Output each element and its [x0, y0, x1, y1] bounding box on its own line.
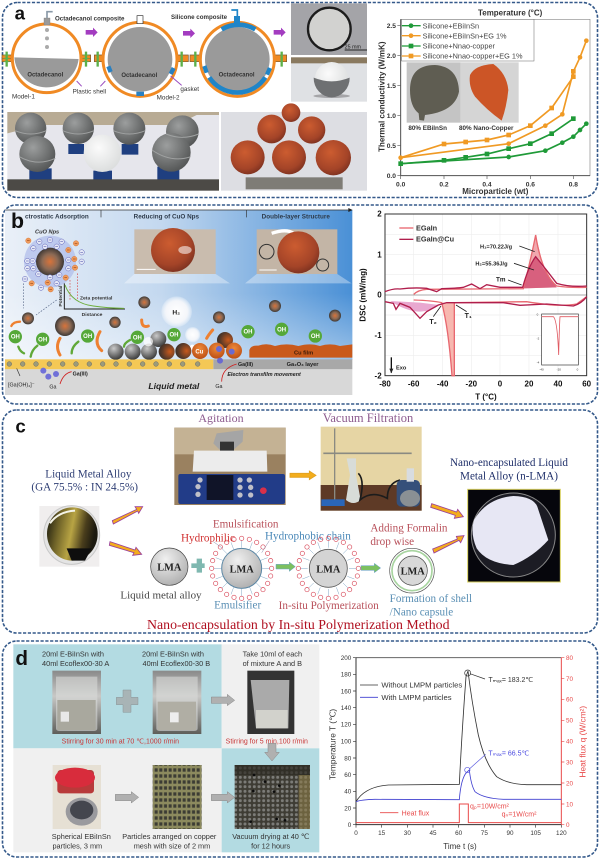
DSC axis ticks and labels: 0: [377, 291, 382, 300]
step captions: 20ml E-BiInSn with: [142, 650, 204, 659]
CuO nanoparticle cluster: [22, 229, 84, 315]
left axis labels: 200: [341, 655, 352, 662]
DSC axis ticks and labels: 40: [554, 380, 563, 389]
chart legend and annotations: Tₘₐₓ= 183.2℃: [488, 677, 533, 684]
right axis labels: 20: [566, 780, 574, 787]
emulsification labels: Emulsifier: [214, 599, 261, 611]
emulsification labels: Emulsification: [213, 519, 279, 531]
step captions: 20ml E-BiInSn with: [42, 650, 104, 659]
heat flux curve: [356, 804, 561, 823]
photo: copper coated spheres with ruler: [221, 103, 367, 191]
step captions: Vacuum drying at 40 ℃: [232, 832, 309, 841]
curve without particles: [356, 671, 561, 802]
layer and reaction labels: Ga: [49, 384, 56, 390]
chart legend and annotations: Without LMPM particles: [381, 681, 462, 690]
diagram labels: Octadecanol: [219, 73, 255, 79]
layer and reaction labels: Ga(III): [238, 362, 253, 368]
hydroxide ions: OH: [277, 327, 286, 333]
product heading: Metal Alloy (n-LMA): [460, 470, 558, 482]
left axis labels: 180: [341, 672, 352, 679]
axis labels and tick values: 0.2: [439, 182, 449, 189]
left axis labels: 120: [341, 722, 352, 729]
diagram labels: Octadecanol: [121, 73, 158, 79]
peak annotations: H₂=55.36J/g: [475, 262, 508, 268]
step captions: for 12 hours: [251, 841, 291, 850]
step captions: particles, 3 mm: [52, 841, 102, 850]
photo: sphere top view: 25 mm: [345, 45, 362, 51]
emulsification labels: In-situ Polymerization: [279, 600, 379, 612]
axis labels and tick values: Microparticle (wt): [462, 187, 529, 196]
chart: temperature and heat flux vs time: [327, 655, 588, 851]
CuO nanoparticle cluster: CuO Nps: [35, 229, 59, 235]
step captions: 40ml Ecoflex00-30 B: [143, 659, 210, 668]
left axis labels: 100: [341, 739, 352, 746]
axis labels and tick values: 0.8: [569, 182, 578, 189]
hydroxide ions: [9, 323, 322, 346]
hydroxide ions: OH: [38, 337, 47, 343]
step captions: Take 10ml of each: [243, 650, 302, 659]
step captions: Particles arranged on copper: [122, 832, 217, 841]
panel letter b: b: [11, 209, 24, 233]
hydroxide ions: OH: [170, 333, 178, 339]
EGaIn@Cu curve: [385, 257, 587, 318]
bottom axis labels: 105: [530, 830, 541, 837]
axis labels and tick values: 0.0: [387, 173, 396, 180]
layer and reaction labels: Ga: [215, 384, 222, 390]
shaded peak areas: [390, 235, 557, 376]
emulsified LMA sphere: LMA: [230, 564, 254, 575]
right axis labels: 10: [566, 801, 574, 808]
emulsification labels: [181, 519, 379, 612]
panel c left half: [15, 411, 450, 632]
bottom axis labels: 120: [556, 830, 567, 837]
copper film: Cu film: [294, 351, 313, 357]
left axis labels: 20: [344, 805, 352, 812]
nano capsule: [390, 548, 434, 593]
header stage labels: ctrostatic Adsorption: [25, 214, 89, 221]
axis labels and tick values: 1.5: [387, 83, 396, 90]
formalin and capsule labels: Adding Formalin: [370, 523, 448, 535]
diagram labels: Model-1: [12, 94, 35, 101]
product heading: Nano-encapsulated Liquid: [450, 457, 568, 469]
diagram labels: Octadecanol: [27, 73, 64, 79]
beaker A photo: [52, 671, 101, 734]
legend: [402, 19, 534, 61]
photo: sphere top view: [291, 3, 367, 55]
orange arrows to product: [431, 504, 464, 553]
right axis labels: [566, 655, 588, 829]
hydroxide ions: OH: [133, 335, 142, 341]
chart: DSC curves: [358, 210, 592, 401]
hydroxide ions: OH: [311, 334, 320, 340]
liquid metal alloy heading: Liquid Metal Alloy: [45, 468, 132, 480]
formalin and capsule labels: Formation of shell: [390, 593, 472, 605]
hydroxide ions: OH: [11, 335, 20, 341]
peak markers: [465, 670, 486, 773]
hydrogen bubbles: H₂: [172, 309, 180, 316]
axis labels and tick values: 0.0: [396, 182, 406, 189]
grey plus sign: [116, 690, 138, 712]
model-2 shell diagram: [94, 16, 188, 96]
orange process arrows: [109, 471, 316, 555]
chart: thermal conductivity vs microparticle: [378, 9, 590, 196]
header stage labels: Reducing of CuO Nps: [134, 214, 200, 221]
green markers: [398, 116, 589, 166]
inset chart: 0: [537, 312, 539, 316]
right axis labels: 70: [566, 676, 574, 683]
agitation step: Agitation: [198, 411, 244, 425]
schematic background: [5, 210, 352, 360]
chart legend and annotations: [360, 677, 537, 819]
axis labels and tick values: 0.5: [387, 143, 396, 150]
diagram labels: Model-2: [157, 94, 180, 101]
axis labels and tick values: Temperature (°C): [478, 9, 543, 18]
left axis labels: 140: [341, 705, 352, 712]
diagram labels: Octadecanol composite: [55, 16, 125, 23]
bottom axis labels: 60: [455, 830, 463, 837]
vacuum filtration step: Vacuum Filtration: [323, 411, 414, 425]
peak annotations: Tm: [496, 276, 506, 283]
axis labels and tick values: 0.4: [482, 182, 492, 189]
layer and reaction labels: Electron transfilm movement: [227, 372, 301, 378]
diagram labels: gasket: [180, 86, 199, 93]
DSC axis ticks and labels: -2: [375, 371, 382, 380]
free particles: [22, 296, 341, 336]
left axis labels: Temperature T (℃): [327, 709, 337, 780]
left axis labels: 80: [344, 755, 352, 762]
photo: n-LMA powder in dish: [468, 489, 560, 582]
embedded photos of pastes: [407, 62, 519, 123]
model-1 shell diagram: [2, 12, 91, 93]
mixed beaker photo: [247, 671, 294, 734]
bare LMA sphere: LMA: [157, 562, 182, 573]
peak annotations: T₁: [465, 313, 472, 320]
legend: Silicone+Nnao-copper: [423, 42, 496, 51]
agitation step: [174, 411, 286, 505]
formalin and capsule labels: /Nano capsule: [390, 606, 453, 618]
beaker B photo: [153, 671, 201, 734]
chart legend and annotations: qₚ=10W/cm²: [470, 803, 510, 810]
right axis labels: 0: [566, 822, 570, 829]
panel letter d: d: [15, 647, 28, 670]
legend: Silicone+EBiInSn+EG 1%: [423, 31, 507, 40]
panel letter a: a: [15, 2, 26, 23]
particles on surface: [108, 331, 242, 364]
DSC axis ticks and labels: 2: [377, 210, 382, 219]
panel c: nano-encapsulation: [2, 410, 598, 633]
peak annotations: T₂: [429, 319, 437, 326]
zeta potential mini chart: Distance: [82, 312, 103, 318]
DSC axis ticks and labels: -60: [408, 380, 420, 389]
panel b mechanism schematic: [5, 208, 353, 395]
orange markers: [398, 38, 589, 160]
hydroxide ions: OH: [244, 330, 252, 336]
legend: Silicone+Nnao-copper+EG 1%: [423, 52, 523, 61]
DSC axis ticks and labels: -80: [379, 380, 391, 389]
polymerized sphere: [296, 536, 360, 600]
legend: Silicone+EBiInSn: [423, 21, 479, 30]
chart legend and annotations: Heat flux: [402, 810, 430, 817]
bottom axis labels: 0: [354, 830, 358, 837]
step captions: of mixture A and B: [243, 659, 302, 668]
left axis labels: [327, 655, 352, 829]
DSC axis ticks and labels: -20: [466, 380, 478, 389]
diagram labels: Plastic shell: [73, 89, 106, 96]
vacuum filtration step: [321, 411, 422, 511]
step captions: Spherical EBiInSn: [52, 832, 111, 841]
panel a: silicone composite encapsulation: [2, 2, 597, 197]
DSC axis ticks and labels: 0: [498, 380, 503, 389]
DSC legend: EGaIn: [416, 223, 438, 232]
flow background cells: [13, 644, 319, 852]
header stage labels: Double-layer Structure: [262, 214, 330, 221]
layer and reaction labels: Ga₂O₃ layer: [287, 362, 319, 368]
liquid metal alloy heading: (GA 75.5% : IN 24.5%): [31, 482, 138, 494]
curve with particles: [356, 770, 561, 802]
panel b: copper film on liquid metal: [2, 205, 598, 404]
photo: liquid metal droplet: [39, 506, 100, 567]
panel a left content: [2, 2, 367, 191]
red stirring notes: [62, 738, 308, 745]
right axis labels: 30: [566, 759, 574, 766]
peak annotations: Exo: [396, 365, 407, 371]
curved reaction arrows: [11, 320, 213, 357]
photo: half-shell sphere: [291, 57, 367, 102]
chart axes: [353, 658, 564, 828]
axis labels and tick values: 80% Nano-Copper: [459, 125, 514, 132]
peak annotations: H₁=70.22J/g: [480, 244, 513, 250]
peak annotations: [389, 244, 535, 373]
green arrow: [276, 562, 295, 571]
axis labels and tick values: 1.0: [387, 113, 396, 120]
axis labels and tick values: 80% EBiInSn: [408, 125, 447, 132]
inset chart: [537, 312, 579, 372]
grey flow arrows: [115, 694, 279, 803]
red stirring notes: Stirring for 5 min,100 r/min: [226, 738, 308, 745]
bare LMA sphere: Liquid metal alloy: [120, 589, 202, 601]
DSC axis ticks and labels: 60: [582, 380, 592, 389]
chart legend and annotations: With LMPM particles: [381, 693, 452, 702]
inset chart: -40: [539, 368, 544, 372]
nano capsule: LMA: [401, 566, 425, 577]
chart legend and annotations: qₙ=1W/cm²: [502, 812, 537, 819]
plus sign: [191, 559, 205, 573]
bottom title: Nano-encapsulation by In-situ Polymerization Method: [147, 617, 450, 632]
bottom axis labels: 15: [378, 830, 386, 837]
purple process arrows: [86, 28, 286, 38]
inset chart: 0: [577, 368, 579, 372]
layer and reaction labels: Liquid metal: [148, 381, 200, 391]
DSC axis ticks and labels: 1: [377, 250, 382, 259]
panel d: preparation and thermal test: [2, 641, 598, 857]
right axis labels: Heat flux q (W/cm²): [578, 706, 588, 778]
left axis labels: 160: [341, 688, 352, 695]
product heading: [450, 457, 568, 482]
chart frame and axes: [397, 19, 590, 179]
emulsified LMA sphere: [209, 536, 274, 600]
DSC axis ticks and labels: -1: [375, 331, 382, 340]
layer and reaction labels: Ga(III): [73, 371, 88, 377]
emulsification labels: Hydrophilic: [181, 532, 235, 544]
DSC axis ticks and labels: [358, 210, 592, 401]
right axis labels: 60: [566, 697, 574, 704]
bottom axis labels: 75: [481, 830, 488, 837]
green arrow two: [361, 563, 381, 573]
DSC axis ticks and labels: DSC (mW/mg): [358, 268, 367, 322]
axis labels and tick values: [378, 9, 578, 196]
DSC legend: EGaIn@Cu: [416, 235, 454, 244]
double layer photo: [245, 229, 352, 283]
DSC legend: [399, 223, 454, 244]
zeta potential mini chart: Zeta potential: [80, 295, 113, 301]
photo: grey and white spheres with ruler: [7, 112, 219, 191]
bare LMA sphere: [120, 548, 202, 601]
DSC axis ticks and labels: T (°C): [475, 392, 497, 401]
formalin and capsule labels: drop wise: [370, 536, 414, 548]
header stage labels: [5, 208, 353, 221]
bottom axis labels: 30: [404, 830, 411, 837]
bottom axis labels: [354, 830, 567, 851]
panel d preparation flow: [13, 644, 319, 852]
left axis labels: 0: [348, 822, 352, 829]
photo: copper mesh: [153, 765, 202, 829]
axis labels and tick values: Thermal conductivity (W/mK): [378, 41, 387, 152]
axis labels and tick values: 0.6: [526, 182, 535, 189]
orange data series: [401, 41, 586, 158]
step captions: 40ml Ecoflex00-30 A: [42, 659, 109, 668]
axis labels and tick values: 2.0: [387, 53, 396, 60]
copper film: [249, 344, 352, 358]
DSC frame and grid: [385, 214, 587, 376]
diagram labels: Silicone composite: [171, 14, 228, 21]
EGaIn curve: [414, 235, 587, 376]
step captions: [42, 650, 309, 850]
zeta potential mini chart: [58, 283, 125, 318]
formalin and capsule labels: [370, 523, 472, 618]
right axis labels: 40: [566, 739, 574, 746]
model-3 silicone composite shell diagram: [190, 10, 287, 96]
bottom axis labels: Time t (s): [443, 842, 477, 851]
inset chart: -4: [537, 360, 540, 364]
axis labels and tick values: 2.5: [387, 23, 396, 30]
DSC axis ticks and labels: 20: [525, 380, 534, 389]
photo: vacuum dried mesh: [235, 765, 310, 829]
particles on surface: Cu: [195, 349, 204, 355]
hydroxide ions: OH: [83, 334, 92, 340]
inset chart: -2: [537, 336, 540, 340]
inset chart: -20: [557, 368, 561, 372]
right axis labels: 80: [566, 655, 574, 662]
zeta potential mini chart: Potential: [58, 285, 64, 307]
layer and reaction labels: [Ga(OH)₄]⁻: [8, 383, 35, 389]
liquid metal alloy heading: [31, 468, 138, 494]
right axis labels: 50: [566, 718, 574, 725]
chart legend and annotations: Tₘₐₓ= 66.5℃: [488, 750, 529, 757]
left axis labels: 60: [344, 772, 352, 779]
substrate layers: [5, 359, 352, 395]
bottom axis labels: 45: [429, 830, 437, 837]
left axis labels: 40: [344, 789, 352, 796]
layer and reaction labels: [8, 362, 319, 391]
DSC axis ticks and labels: -40: [437, 380, 449, 389]
hydrogen bubbles: [161, 296, 200, 350]
reaction photos: [124, 228, 230, 283]
green data series: [401, 119, 586, 164]
bottom axis labels: 90: [506, 830, 514, 837]
photo: spherical particles in jar: [53, 765, 101, 829]
emulsification labels: Hydrophobic chain: [265, 530, 351, 542]
diagram labels: [12, 14, 255, 101]
panel c right half: [296, 411, 568, 618]
red stirring notes: Stirring for 30 min at 70 ℃,1000 r/min: [62, 738, 179, 745]
polymerized sphere: LMA: [316, 564, 341, 575]
step captions: mesh with size of 2 mm: [134, 841, 210, 850]
panel letter c: c: [15, 416, 26, 437]
